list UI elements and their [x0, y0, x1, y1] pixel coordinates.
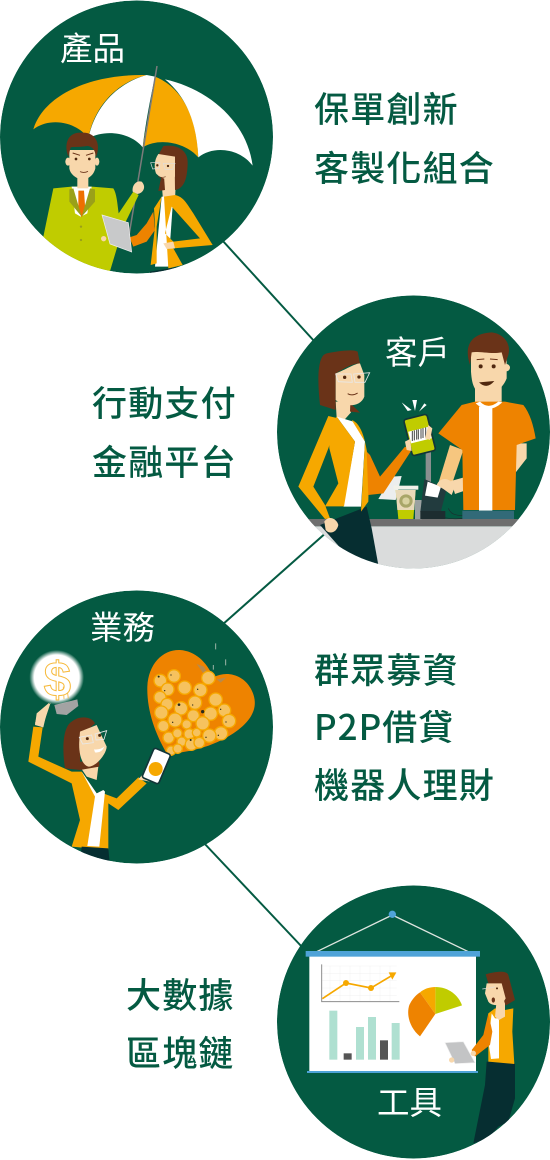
- man in green suit: [43, 133, 144, 277]
- woman holding phone: [28, 703, 152, 867]
- text: customer points: 金融平台: [92, 444, 237, 483]
- counter: [308, 519, 522, 573]
- projection screen: [306, 911, 480, 1073]
- pos terminal and coffee cup: [378, 452, 462, 520]
- icon: phone barcode: [402, 400, 436, 456]
- bar chart: [329, 1011, 400, 1060]
- panel: tools circle: [277, 886, 550, 1158]
- woman with phone: [298, 350, 412, 565]
- icon: coin heart: [147, 643, 255, 755]
- text: product points: 保單創新: [314, 91, 459, 130]
- icon: phone with coin: [142, 748, 171, 784]
- text: tools points: 區塊鏈: [126, 1035, 235, 1074]
- text: business points: [314, 652, 495, 806]
- presenter woman: [445, 972, 515, 1143]
- connector lines: [203, 240, 328, 948]
- text: customer points: 行動支付: [92, 385, 237, 424]
- cashier: [437, 332, 536, 519]
- label: customer: 客戶: [385, 335, 450, 371]
- panel: customer circle: [277, 296, 550, 573]
- panel: business circle: [0, 590, 273, 867]
- text: tools points: 大數據: [126, 977, 235, 1016]
- text: customer points: [92, 385, 237, 483]
- label: product: 產品: [60, 31, 125, 67]
- text: business points: 群眾募資: [314, 652, 459, 691]
- label: tools: 工具: [377, 1085, 442, 1121]
- text: business points: 機器人理財: [314, 767, 495, 806]
- icon: dollar lightbulb: [29, 650, 84, 727]
- line chart: [322, 964, 399, 1002]
- icon: dollar lightbulb: $: [44, 653, 71, 708]
- text: tools points: [126, 977, 235, 1074]
- icon: umbrella: [33, 66, 253, 233]
- woman in orange cardigan: [129, 146, 213, 277]
- panel: product circle: [0, 0, 273, 277]
- text: product points: 客製化組合: [314, 150, 495, 189]
- text: product points: [314, 91, 495, 189]
- icon: tablet: [102, 215, 132, 252]
- text: business points: P2P借貸: [314, 700, 454, 751]
- pie chart: [408, 987, 462, 1036]
- label: business: 業務: [90, 610, 155, 646]
